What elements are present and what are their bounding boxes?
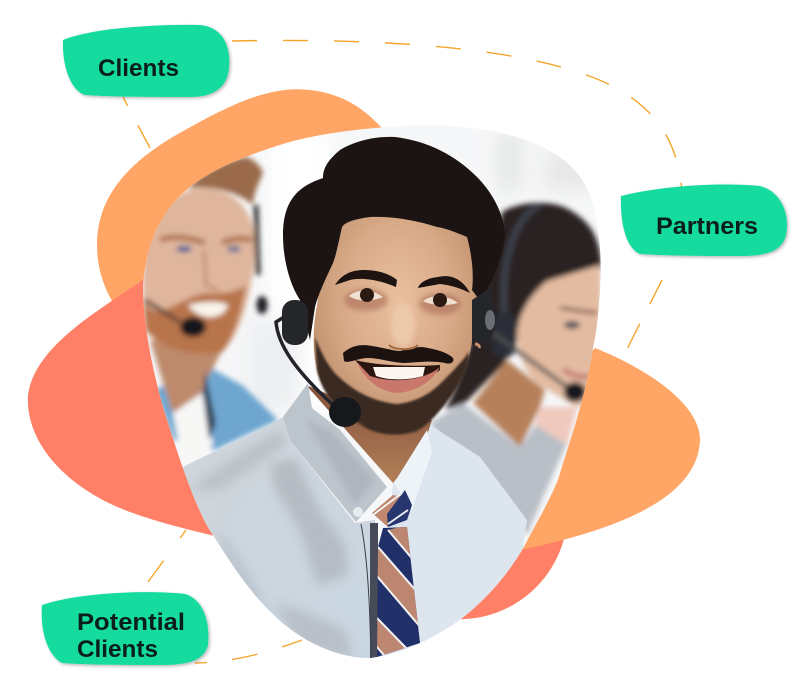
tie	[372, 490, 420, 657]
headset	[256, 205, 258, 275]
eyes and brows	[335, 270, 470, 349]
colleague left (blurred)	[143, 157, 278, 480]
label: Partners: Partners	[656, 213, 758, 240]
colleague right (blurred)	[430, 203, 602, 535]
orange blob: upper left	[97, 89, 382, 320]
collar	[283, 383, 432, 522]
jacket	[155, 366, 278, 450]
office background	[143, 125, 598, 620]
face	[314, 216, 477, 406]
photo of call centre team	[130, 115, 610, 670]
headset	[504, 205, 540, 323]
connecting dashed lines	[123, 40, 682, 663]
coral blob: left	[28, 275, 260, 536]
neck	[306, 385, 432, 483]
face	[143, 188, 255, 353]
label: Clients	[63, 25, 229, 97]
face	[517, 265, 602, 407]
placket	[370, 523, 378, 660]
hair	[283, 137, 505, 340]
eye shading	[344, 289, 461, 347]
neck	[150, 340, 225, 412]
label: Clients: Clients	[98, 55, 179, 82]
headset	[276, 288, 497, 427]
orange blob: right	[500, 348, 700, 550]
shirt	[183, 417, 527, 670]
label: Partners	[621, 184, 787, 256]
smile	[355, 360, 440, 393]
t-shirt	[173, 393, 213, 480]
neck	[473, 360, 545, 447]
label: Potential Clients: Potential	[77, 609, 185, 636]
hair	[445, 203, 602, 410]
striped shirt	[430, 403, 567, 535]
label: Potential Clients: Clients	[77, 636, 158, 663]
beard	[315, 337, 469, 435]
label: Potential Clients	[42, 592, 208, 665]
coral blob: lower right	[440, 480, 565, 619]
moustache	[343, 345, 453, 364]
